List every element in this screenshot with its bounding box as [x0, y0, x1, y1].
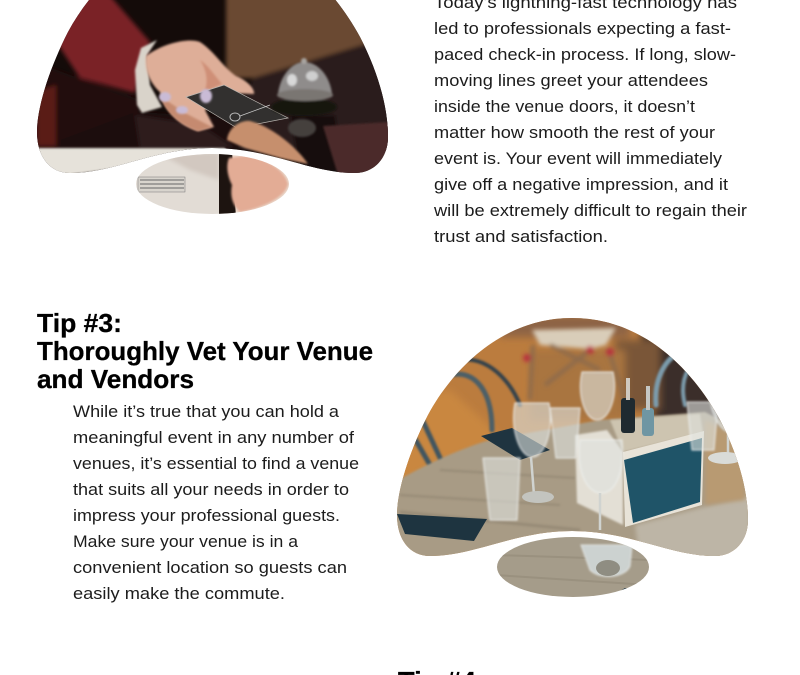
text block: venue paragraph: While it’s true that you can hold a [73, 402, 340, 421]
text block: check-in paragraph: led to professionals expecting a fast- [434, 19, 731, 38]
heading: Tip #3 [37, 308, 373, 394]
bottles [621, 398, 635, 433]
text block: check-in paragraph: trust and satisfaction. [434, 227, 608, 246]
text block: check-in paragraph: event is. Your event will immediately [434, 149, 723, 168]
heading: Tip #3: Thoroughly Vet Your Venue [37, 336, 373, 366]
text block: venue paragraph: convenient location so guests can [73, 558, 347, 577]
text block: check-in paragraph: give off a negative impression, and it [434, 175, 728, 194]
box [575, 430, 623, 525]
text block: venue paragraph: meaningful event in any number of [73, 428, 354, 447]
text block: venue paragraph: venues, it’s essential to find a venue [73, 454, 359, 473]
photo: hotel check-in key card handover [30, 0, 395, 220]
text block: venue paragraph: Make sure your venue is in a [73, 532, 299, 551]
text block: venue paragraph [73, 402, 359, 603]
text block: check-in paragraph: paced check-in process. If long, slow- [434, 45, 736, 64]
heading: Tip #3: Tip #3: [37, 308, 122, 338]
card [186, 85, 288, 128]
text block: venue paragraph: impress your professional guests. [73, 506, 340, 525]
heading: Tip #3: and Vendors [37, 364, 194, 394]
napkins [481, 428, 550, 460]
text block: check-in paragraph: inside the venue doors, it doesn’t [434, 97, 695, 116]
glasses [483, 372, 735, 520]
text block: check-in paragraph [433, 0, 747, 246]
paper [36, 148, 225, 175]
table [390, 412, 760, 560]
cuff [135, 40, 162, 113]
text block: venue paragraph: easily make the commute. [73, 584, 285, 603]
photo inset: lower hand and document [136, 154, 289, 214]
text block: venue paragraph: that suits all your needs in order to [73, 480, 349, 499]
bell [271, 58, 337, 137]
chairs [411, 352, 695, 465]
text block: check-in paragraph: will be extremely difficult to regain their [433, 201, 747, 220]
wallet [323, 122, 390, 175]
stool [523, 328, 625, 400]
photo inset: table and glass [497, 537, 649, 597]
lower hand [227, 121, 308, 164]
text block: check-in paragraph: matter how smooth the rest of your [434, 123, 715, 142]
photo: restaurant table setting [390, 310, 760, 600]
hand [146, 41, 254, 131]
text block: check-in paragraph: moving lines greet your attendees [434, 71, 708, 90]
